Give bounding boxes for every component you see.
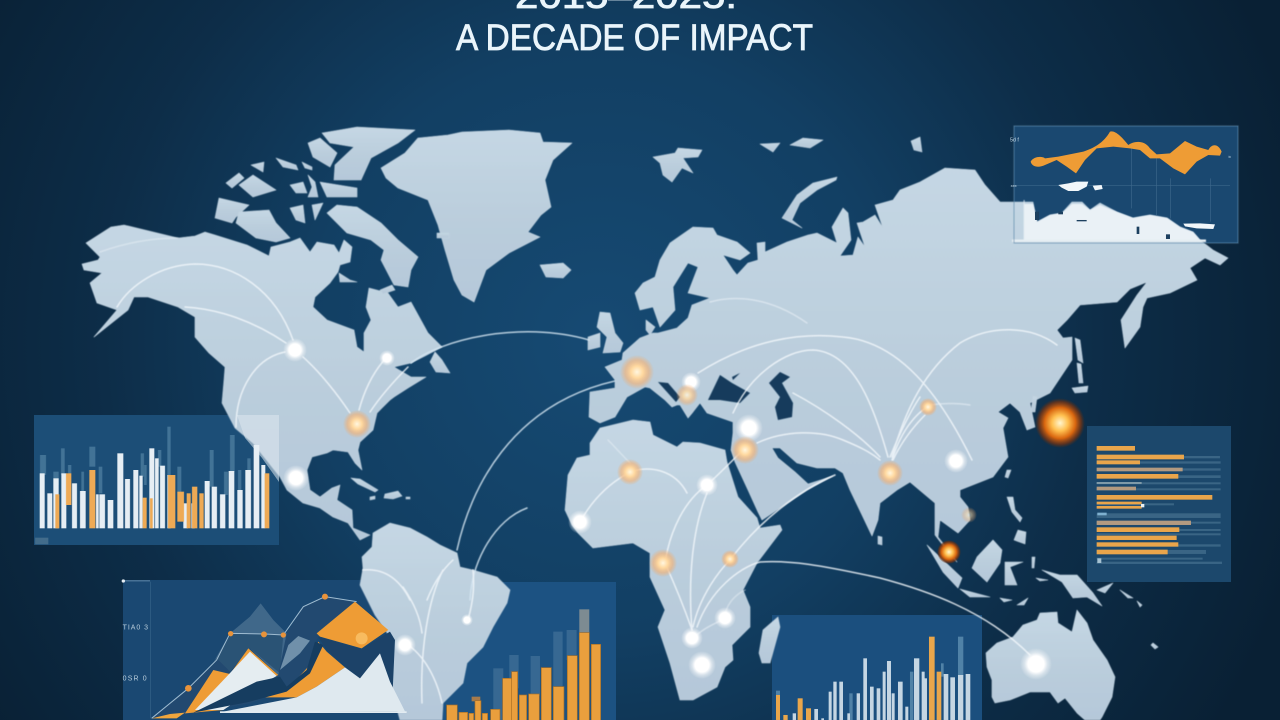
world map xyxy=(82,127,1228,720)
white peaks left xyxy=(195,652,277,710)
landmass: North and Central America xyxy=(82,225,442,540)
panel: line-area chart backdrop xyxy=(123,580,483,720)
chart: top right orange area xyxy=(1010,131,1231,239)
islands: East Asia xyxy=(878,338,1088,545)
node: South America xyxy=(394,614,473,656)
islands: Arctic Russia xyxy=(653,137,922,228)
title xyxy=(456,0,813,58)
connection arcs xyxy=(100,238,1057,703)
axis label: 0SR 0 xyxy=(123,676,147,683)
node: North America xyxy=(283,338,395,491)
panel: orange bar chart backdrop xyxy=(440,582,616,720)
orange top xyxy=(317,602,388,648)
navy stripes xyxy=(193,642,323,713)
trend markers xyxy=(185,594,328,692)
orange left xyxy=(185,648,278,713)
chart: left vertical bars xyxy=(35,427,269,544)
navy wedge xyxy=(318,632,395,692)
white base band xyxy=(220,711,407,713)
orange middle xyxy=(250,642,345,697)
node: Africa xyxy=(568,459,739,679)
white peaks right xyxy=(223,653,405,712)
islands: Britain and Ireland xyxy=(588,312,655,353)
island: Newfoundland xyxy=(430,352,450,373)
islands: Indonesia and Papua xyxy=(927,540,1158,649)
island: Madagascar xyxy=(759,617,780,663)
inland seas xyxy=(658,372,793,420)
landmass: South America xyxy=(360,523,510,720)
orange foot xyxy=(152,713,185,718)
dark slate ridge xyxy=(217,633,283,673)
node: Japan glow xyxy=(1035,398,1085,448)
panel: right horizontal bar chart backdrop xyxy=(1087,426,1231,582)
chart: right horizontal bars xyxy=(1097,446,1222,564)
island: Iceland xyxy=(540,263,571,278)
node: Europe and Middle East xyxy=(620,355,763,464)
Arctic archipelago xyxy=(215,127,449,294)
node: Australia xyxy=(1020,648,1052,680)
light slate ridge xyxy=(280,636,310,670)
title: A DECADE OF IMPACT xyxy=(456,17,813,58)
panel overlay: left chart over land xyxy=(237,415,279,482)
panel: top right area chart backdrop xyxy=(1014,126,1238,243)
chart: top right orange area: ≈ xyxy=(1228,154,1231,160)
panel: lower right bar chart backdrop xyxy=(772,615,982,720)
landmass: Eurasia xyxy=(589,168,1228,562)
landmass: Africa xyxy=(565,420,782,700)
island: Caribbean xyxy=(351,478,410,500)
chart: top right orange area: xxx xyxy=(1011,183,1017,188)
chart: bottom orange bars xyxy=(447,609,601,720)
chart: lower right bars xyxy=(776,637,970,720)
trend line xyxy=(152,597,357,718)
network nodes xyxy=(283,338,1085,680)
panel frame: top right chart xyxy=(1012,126,1238,243)
slate mountain xyxy=(187,603,310,710)
node: Asia xyxy=(877,398,977,523)
chart: line-area chart xyxy=(122,579,407,718)
axis label: TIA0 3 xyxy=(123,624,148,631)
chart: top right orange area: 5d f xyxy=(1010,138,1019,144)
landmass: Australia xyxy=(986,610,1115,720)
panel: left bar chart backdrop xyxy=(34,415,279,545)
navy ridge xyxy=(152,597,357,718)
node: Malay glow xyxy=(937,540,961,564)
landmass: Greenland xyxy=(381,130,572,302)
